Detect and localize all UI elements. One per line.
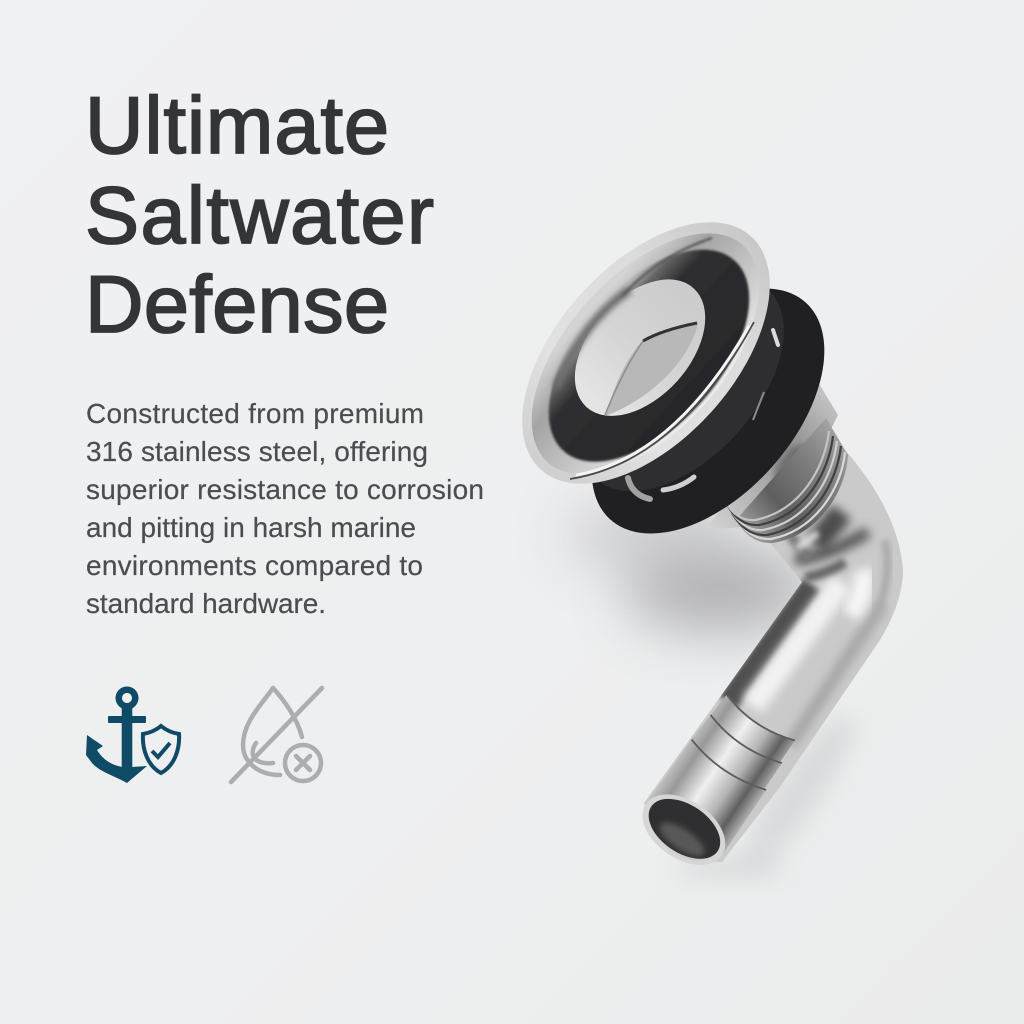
tube opening <box>630 780 738 879</box>
body text: environments compared to <box>86 550 423 581</box>
title: Defense <box>85 260 389 350</box>
body text: Constructed from premium <box>86 398 424 429</box>
elbow and hose tube <box>644 450 903 862</box>
body text: superior resistance to corrosion <box>86 474 484 505</box>
dark collar <box>541 239 823 529</box>
barbed hose end <box>630 691 798 879</box>
icon: no corrosion drop <box>231 688 322 782</box>
title: Saltwater <box>85 171 434 261</box>
shield with check <box>143 726 179 773</box>
body text: standard hardware. <box>86 588 326 619</box>
title <box>85 81 434 350</box>
body text: 316 stainless steel, offering <box>86 436 428 467</box>
polished flange <box>476 177 816 529</box>
soft shadow <box>565 499 869 880</box>
cap reflection <box>605 323 698 416</box>
dark recess <box>511 214 787 498</box>
product photo: stainless thru-hull elbow fitting <box>522 222 903 882</box>
threaded stem <box>725 418 848 543</box>
rubber gasket <box>547 246 869 576</box>
rim reflections <box>556 238 754 479</box>
icon: anchor with shield <box>86 686 179 783</box>
title: Ultimate <box>85 81 389 171</box>
anchor <box>86 686 147 783</box>
body text <box>86 398 484 619</box>
polished cap <box>549 255 731 441</box>
body text: and pitting in harsh marine <box>86 512 416 543</box>
hex nut behind gasket <box>705 382 838 530</box>
